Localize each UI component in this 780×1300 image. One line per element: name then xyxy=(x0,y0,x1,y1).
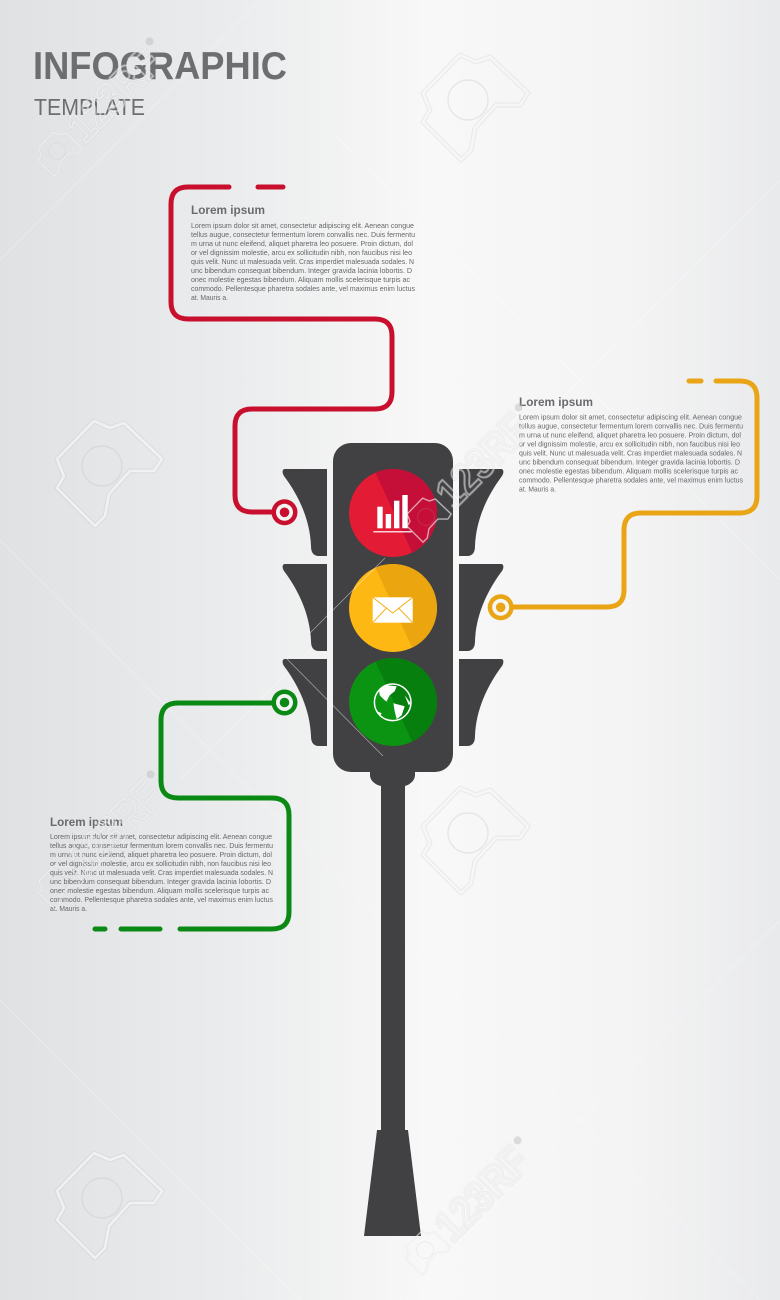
body text: tellus augue, consectetur fermentum lorem convallis nec. Duis fermentu xyxy=(519,422,743,430)
watermark: logo center xyxy=(385,394,555,564)
body text: tellus augue, consectetur fermentum lorem convallis nec. Duis fermentu xyxy=(191,230,415,239)
body text: quis velit. Nunc ut malesuada velit. Cras imperdiet malesuada sodales. N xyxy=(519,448,742,458)
heading: Lorem ipsum xyxy=(50,815,123,829)
watermark: logo center: 123RF xyxy=(427,405,540,518)
body text: unc bibendum consequat bibendum. Integer gravida lacinia lobortis. D xyxy=(50,877,271,886)
panel: green text xyxy=(50,815,273,913)
watermark: logo lower left: 123RF xyxy=(59,772,172,885)
scratch lines xyxy=(287,558,385,756)
body text xyxy=(191,221,415,302)
body text: m urna ut nunc eleifend, aliquet pharetra leo posuere. Proin dictum, dol xyxy=(519,430,741,440)
connector: green xyxy=(95,703,289,929)
watermark: logo lower left xyxy=(17,761,187,931)
marker: yellow xyxy=(488,594,514,620)
body text xyxy=(50,832,273,913)
watermark: large stamps xyxy=(57,55,528,1258)
body text: commodo. Pellentesque pharetra sodales ante, vel maximus enim luctus xyxy=(50,895,273,904)
title xyxy=(33,45,287,120)
housing xyxy=(333,443,453,772)
visors left xyxy=(283,469,327,746)
body text: or vel dignissim molestie, arcu ex sollicitudin nibh, non faucibus nisi leo xyxy=(50,859,271,868)
watermark: logo bottom xyxy=(384,1127,554,1297)
body text: m urna ut nunc eleifend, aliquet pharetra leo posuere. Proin dictum, dol xyxy=(191,239,413,248)
yellow lamp xyxy=(349,564,437,652)
green lamp xyxy=(349,658,437,746)
connector: yellow xyxy=(512,381,757,607)
body text: unc bibendum consequat bibendum. Integer gravida lacinia lobortis. D xyxy=(191,266,412,275)
traffic light xyxy=(283,443,503,1236)
pole xyxy=(364,770,421,1236)
panel: red text xyxy=(191,203,415,302)
body text: quis velit. Nunc ut malesuada velit. Cras imperdiet malesuada sodales. N xyxy=(50,868,273,877)
marker: red xyxy=(272,499,298,525)
body text: onec molestie egestas bibendum. Aliquam mollis scelerisque turpis ac xyxy=(519,466,738,476)
body text: onec molestie egestas bibendum. Aliquam mollis scelerisque turpis ac xyxy=(50,886,269,895)
body text: quis velit. Nunc ut malesuada velit. Cras imperdiet malesuada sodales. N xyxy=(191,257,414,266)
red lamp xyxy=(349,469,437,557)
visors right xyxy=(459,469,503,746)
watermark: logo center: 123RF xyxy=(427,405,540,518)
body text: commodo. Pellentesque pharetra sodales ante, vel maximus enim luctus xyxy=(519,476,743,484)
body text: at. Mauris a. xyxy=(50,904,87,913)
panel: yellow text xyxy=(519,395,743,494)
watermark: logo top left: 123RF xyxy=(58,39,171,152)
body text: at. Mauris a. xyxy=(191,293,228,302)
icon: globe xyxy=(374,684,411,721)
heading: Lorem ipsum xyxy=(519,395,593,409)
connector: red xyxy=(171,187,392,512)
watermark: logo bottom: 123RF xyxy=(426,1138,539,1251)
body text: or vel dignissim molestie, arcu ex sollicitudin nibh, non faucibus nisi leo xyxy=(191,248,412,257)
watermark: logo bottom: 123RF xyxy=(426,1138,539,1251)
body text xyxy=(519,412,743,494)
icon: bar chart xyxy=(373,495,412,532)
body text: Lorem ipsum dolor sit amet, consectetur adipiscing elit. Aenean congue xyxy=(50,832,272,841)
body text: tellus augue, consectetur fermentum lorem convallis nec. Duis fermentu xyxy=(50,841,273,850)
heading: infographic: INFOGRAPHIC xyxy=(33,45,287,88)
watermark: logo top left xyxy=(16,28,186,198)
heading: Lorem ipsum xyxy=(191,203,265,217)
body text: Lorem ipsum dolor sit amet, consectetur adipiscing elit. Aenean congue xyxy=(519,412,742,422)
icon: envelope xyxy=(373,597,413,623)
body text: commodo. Pellentesque pharetra sodales ante, vel maximus enim luctus xyxy=(191,284,415,293)
body text: at. Mauris a. xyxy=(519,484,556,494)
body text: unc bibendum consequat bibendum. Integer gravida lacinia lobortis. D xyxy=(519,458,740,466)
watermark: logo lower left: 123RF xyxy=(59,772,172,885)
body text: m urna ut nunc eleifend, aliquet pharetra leo posuere. Proin dictum, dol xyxy=(50,850,272,859)
body text: Lorem ipsum dolor sit amet, consectetur adipiscing elit. Aenean congue xyxy=(191,221,414,230)
marker: green xyxy=(272,690,298,716)
watermark: logo top left: 123RF xyxy=(58,39,171,152)
body text: or vel dignissim molestie, arcu ex sollicitudin nibh, non faucibus nisi leo xyxy=(519,440,740,448)
subheading: template: TEMPLATE xyxy=(34,94,145,120)
body text: onec molestie egestas bibendum. Aliquam mollis scelerisque turpis ac xyxy=(191,275,410,284)
